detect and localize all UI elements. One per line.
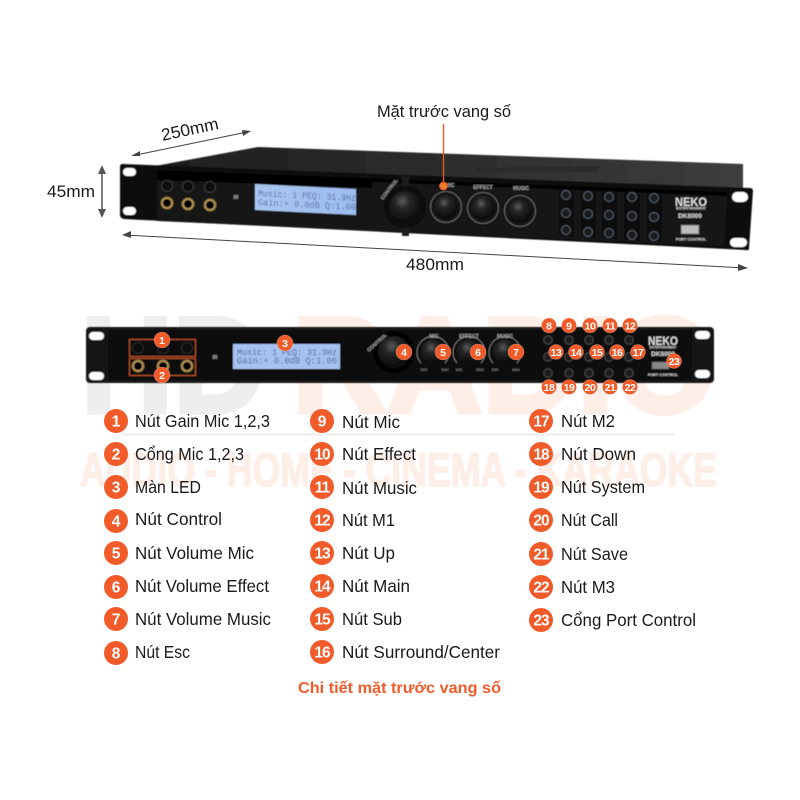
highlight box: gain xyxy=(130,340,196,356)
item 11: 11 xyxy=(315,480,331,496)
item 18: Nút Down xyxy=(561,444,636,464)
LCD screen xyxy=(233,344,340,369)
number markers on front view: 8 xyxy=(546,320,552,332)
item 16: 16 xyxy=(314,644,331,662)
IR label: IR xyxy=(212,355,218,361)
item 3: 3 xyxy=(112,480,121,496)
control knob xyxy=(366,331,415,373)
volume knobs xyxy=(417,334,521,372)
volume knobs: MAX xyxy=(441,368,449,372)
number markers on front view: 10 xyxy=(585,320,596,332)
brand logo xyxy=(675,197,707,242)
item 17: 17 xyxy=(533,414,549,430)
number markers on front view: 6 xyxy=(475,347,481,359)
number markers on front view: 22 xyxy=(625,382,636,394)
item 21: 21 xyxy=(533,546,550,564)
item 11 xyxy=(310,475,417,499)
LCD text: Gain:+ 0.0dB Q:1.00 xyxy=(258,198,356,213)
LCD text: Gain:+ 0.0dB Q:1.00 xyxy=(237,356,337,366)
number markers on front view: 3 xyxy=(282,338,288,350)
item 18 xyxy=(529,442,636,466)
item 16 xyxy=(310,640,500,664)
watermark: HD RADIO xyxy=(81,289,716,441)
control knob: CONTROL xyxy=(366,332,389,353)
item 15: 15 xyxy=(314,612,331,628)
number markers on front view: 5 xyxy=(440,347,446,359)
dimension: width 480mm: 480mm xyxy=(406,255,464,274)
mic gain knobs xyxy=(132,342,192,354)
caption: Chi tiết mặt trước vang số xyxy=(298,680,502,697)
LCD text xyxy=(237,348,337,366)
IR label: IR xyxy=(234,195,239,201)
item 8: Nút Esc xyxy=(135,642,190,662)
number markers on front view: 20 xyxy=(585,382,596,394)
watermark: HD RADIO: HD xyxy=(81,289,265,441)
control section panel xyxy=(372,182,555,236)
item 7: Nút Volume Music xyxy=(135,609,271,629)
item 23: Cổng Port Control xyxy=(561,610,696,630)
item 13: Nút Up xyxy=(342,543,395,563)
item 17 xyxy=(529,409,615,433)
item 3 xyxy=(104,475,201,499)
item 15 xyxy=(310,607,402,631)
item 9 xyxy=(310,409,400,433)
buttons xyxy=(544,336,633,377)
dimension: depth 250mm: 250mm xyxy=(160,114,220,145)
device: front view xyxy=(86,327,714,383)
item 19 xyxy=(529,475,645,499)
item 4: 4 xyxy=(112,514,121,530)
brand logo: NEKO xyxy=(648,334,678,348)
item 5 xyxy=(104,541,254,565)
item 16: Nút Surround/Center xyxy=(342,642,500,662)
number markers on front view: 15 xyxy=(592,347,603,359)
mic jacks xyxy=(132,360,194,372)
item 12: Nút M1 xyxy=(342,510,395,530)
item 23: 23 xyxy=(533,612,550,630)
item 1: Nút Gain Mic 1,2,3 xyxy=(135,411,270,431)
volume knobs: MUSIC xyxy=(513,186,529,192)
number markers on front view: 4 xyxy=(401,347,407,359)
item 2: Cổng Mic 1,2,3 xyxy=(135,444,244,464)
callout marker: front panel xyxy=(440,124,447,190)
item 11: Nút Music xyxy=(342,478,417,498)
number markers on front view: 11 xyxy=(605,320,616,332)
item 20 xyxy=(529,508,618,532)
item 21 xyxy=(529,542,628,566)
item 4 xyxy=(104,509,222,533)
item 10: 10 xyxy=(314,446,330,464)
legend column 1 xyxy=(104,409,271,665)
LCD text xyxy=(258,189,356,213)
number markers on front view: 12 xyxy=(625,320,636,332)
item 10: Nút Effect xyxy=(342,444,416,464)
item 12 xyxy=(310,508,395,532)
number markers on front view xyxy=(154,318,682,394)
buttons xyxy=(562,190,658,240)
item 20: 20 xyxy=(533,512,549,530)
item 3: Màn LED xyxy=(135,477,201,497)
item 9: Nút Mic xyxy=(342,412,400,432)
mic gain knobs xyxy=(162,180,216,192)
volume knobs: MAX xyxy=(512,368,520,372)
item 6: 6 xyxy=(112,580,121,596)
legend column 3 xyxy=(529,409,696,632)
item 7 xyxy=(104,607,271,631)
mic jacks xyxy=(160,196,216,212)
item 14: 14 xyxy=(314,578,331,596)
item 2 xyxy=(104,442,244,466)
item 8 xyxy=(104,641,190,665)
item 9: 9 xyxy=(318,414,327,430)
number markers on front view: 9 xyxy=(566,320,572,332)
ear holes xyxy=(89,331,710,380)
item 6: Nút Volume Effect xyxy=(135,576,269,596)
item 7: 7 xyxy=(112,612,120,628)
item 10 xyxy=(310,442,416,466)
volume knobs: MIN xyxy=(456,368,463,372)
item 22: Nút M3 xyxy=(561,577,615,597)
item 14 xyxy=(310,574,410,598)
volume knobs: MIC xyxy=(429,334,439,340)
item 1: 1 xyxy=(112,414,121,430)
item 13: 13 xyxy=(314,546,331,562)
heading: front panel label: Mặt trước vang số xyxy=(377,102,512,121)
control knob xyxy=(380,176,426,236)
brand logo: PORT CONTROL xyxy=(648,373,679,377)
volume knobs: MUSIC xyxy=(497,334,513,340)
brand logo: ENTERTAINMENT xyxy=(649,346,677,350)
volume knobs xyxy=(430,183,536,226)
item 17: Nút M2 xyxy=(561,411,615,431)
chassis xyxy=(86,327,714,383)
volume knobs: EFFECT xyxy=(459,334,479,340)
volume knobs: MIN xyxy=(492,368,499,372)
number markers on front view: 2 xyxy=(159,370,165,382)
item 22: 22 xyxy=(533,580,549,596)
number markers on front view: 21 xyxy=(605,382,616,394)
highlight box: jacks xyxy=(130,358,196,376)
front face xyxy=(120,164,753,250)
item 22 xyxy=(529,575,615,599)
item 8: 8 xyxy=(112,646,121,662)
number markers on front view: 16 xyxy=(612,347,623,359)
watermark: HD RADIO: RADIO xyxy=(292,289,716,441)
volume knobs: MIN xyxy=(421,368,428,372)
item 4: Nút Control xyxy=(135,509,222,529)
LCD screen xyxy=(255,184,356,215)
item 2: 2 xyxy=(112,446,120,464)
dimension: width 480mm xyxy=(122,231,748,274)
brand logo: DK8000 xyxy=(678,213,702,220)
brand logo xyxy=(648,334,679,377)
item 20: Nút Call xyxy=(561,510,618,530)
brand logo: ENTERTAINMENT xyxy=(676,206,707,210)
legend column 2 xyxy=(310,409,500,664)
brand logo: DK8000 xyxy=(651,351,675,358)
device: perspective view xyxy=(120,147,753,250)
volume knobs: MIC xyxy=(445,183,455,189)
ear holes xyxy=(123,168,748,247)
item 13 xyxy=(310,541,395,565)
number markers on front view: 23 xyxy=(669,356,680,368)
number markers on front view: 13 xyxy=(551,347,562,359)
item 21: Nút Save xyxy=(561,544,628,564)
item 6 xyxy=(104,575,269,599)
number markers on front view: 14 xyxy=(571,347,582,359)
dimension: height 45mm xyxy=(47,165,106,218)
number markers on front view: 19 xyxy=(564,382,575,394)
item 23 xyxy=(529,608,696,632)
control knob: CONTROL xyxy=(380,178,400,201)
item 14: Nút Main xyxy=(342,576,410,596)
item 1 xyxy=(104,409,270,433)
top cover xyxy=(155,147,743,188)
LCD text: Music: 1 PEQ: 31.9Hz xyxy=(237,348,337,358)
item 5: 5 xyxy=(112,546,121,562)
item 19: 19 xyxy=(533,480,550,496)
dimension: depth 250mm xyxy=(131,114,251,156)
LCD text: Music: 1 PEQ: 31.9Hz xyxy=(258,189,356,204)
dimension: height 45mm: 45mm xyxy=(47,182,95,201)
button strips xyxy=(559,190,662,242)
USB port xyxy=(652,362,669,369)
item 19: Nút System xyxy=(561,477,645,497)
number markers on front view: 1 xyxy=(159,335,165,347)
item 18: 18 xyxy=(533,446,550,464)
number markers on front view: 18 xyxy=(544,382,555,394)
brand logo: PORT CONTROL xyxy=(676,238,707,242)
item 12: 12 xyxy=(314,512,330,530)
USB port xyxy=(681,225,699,234)
volume knobs: MAX xyxy=(476,368,484,372)
brand logo: NEKO xyxy=(675,197,707,209)
inner panel xyxy=(157,170,727,246)
number markers on front view: 17 xyxy=(633,347,644,359)
number markers on front view: 7 xyxy=(513,347,519,359)
volume knobs: EFFECT xyxy=(473,185,493,191)
item 5: Nút Volume Mic xyxy=(135,543,254,563)
item 15: Nút Sub xyxy=(342,609,402,629)
